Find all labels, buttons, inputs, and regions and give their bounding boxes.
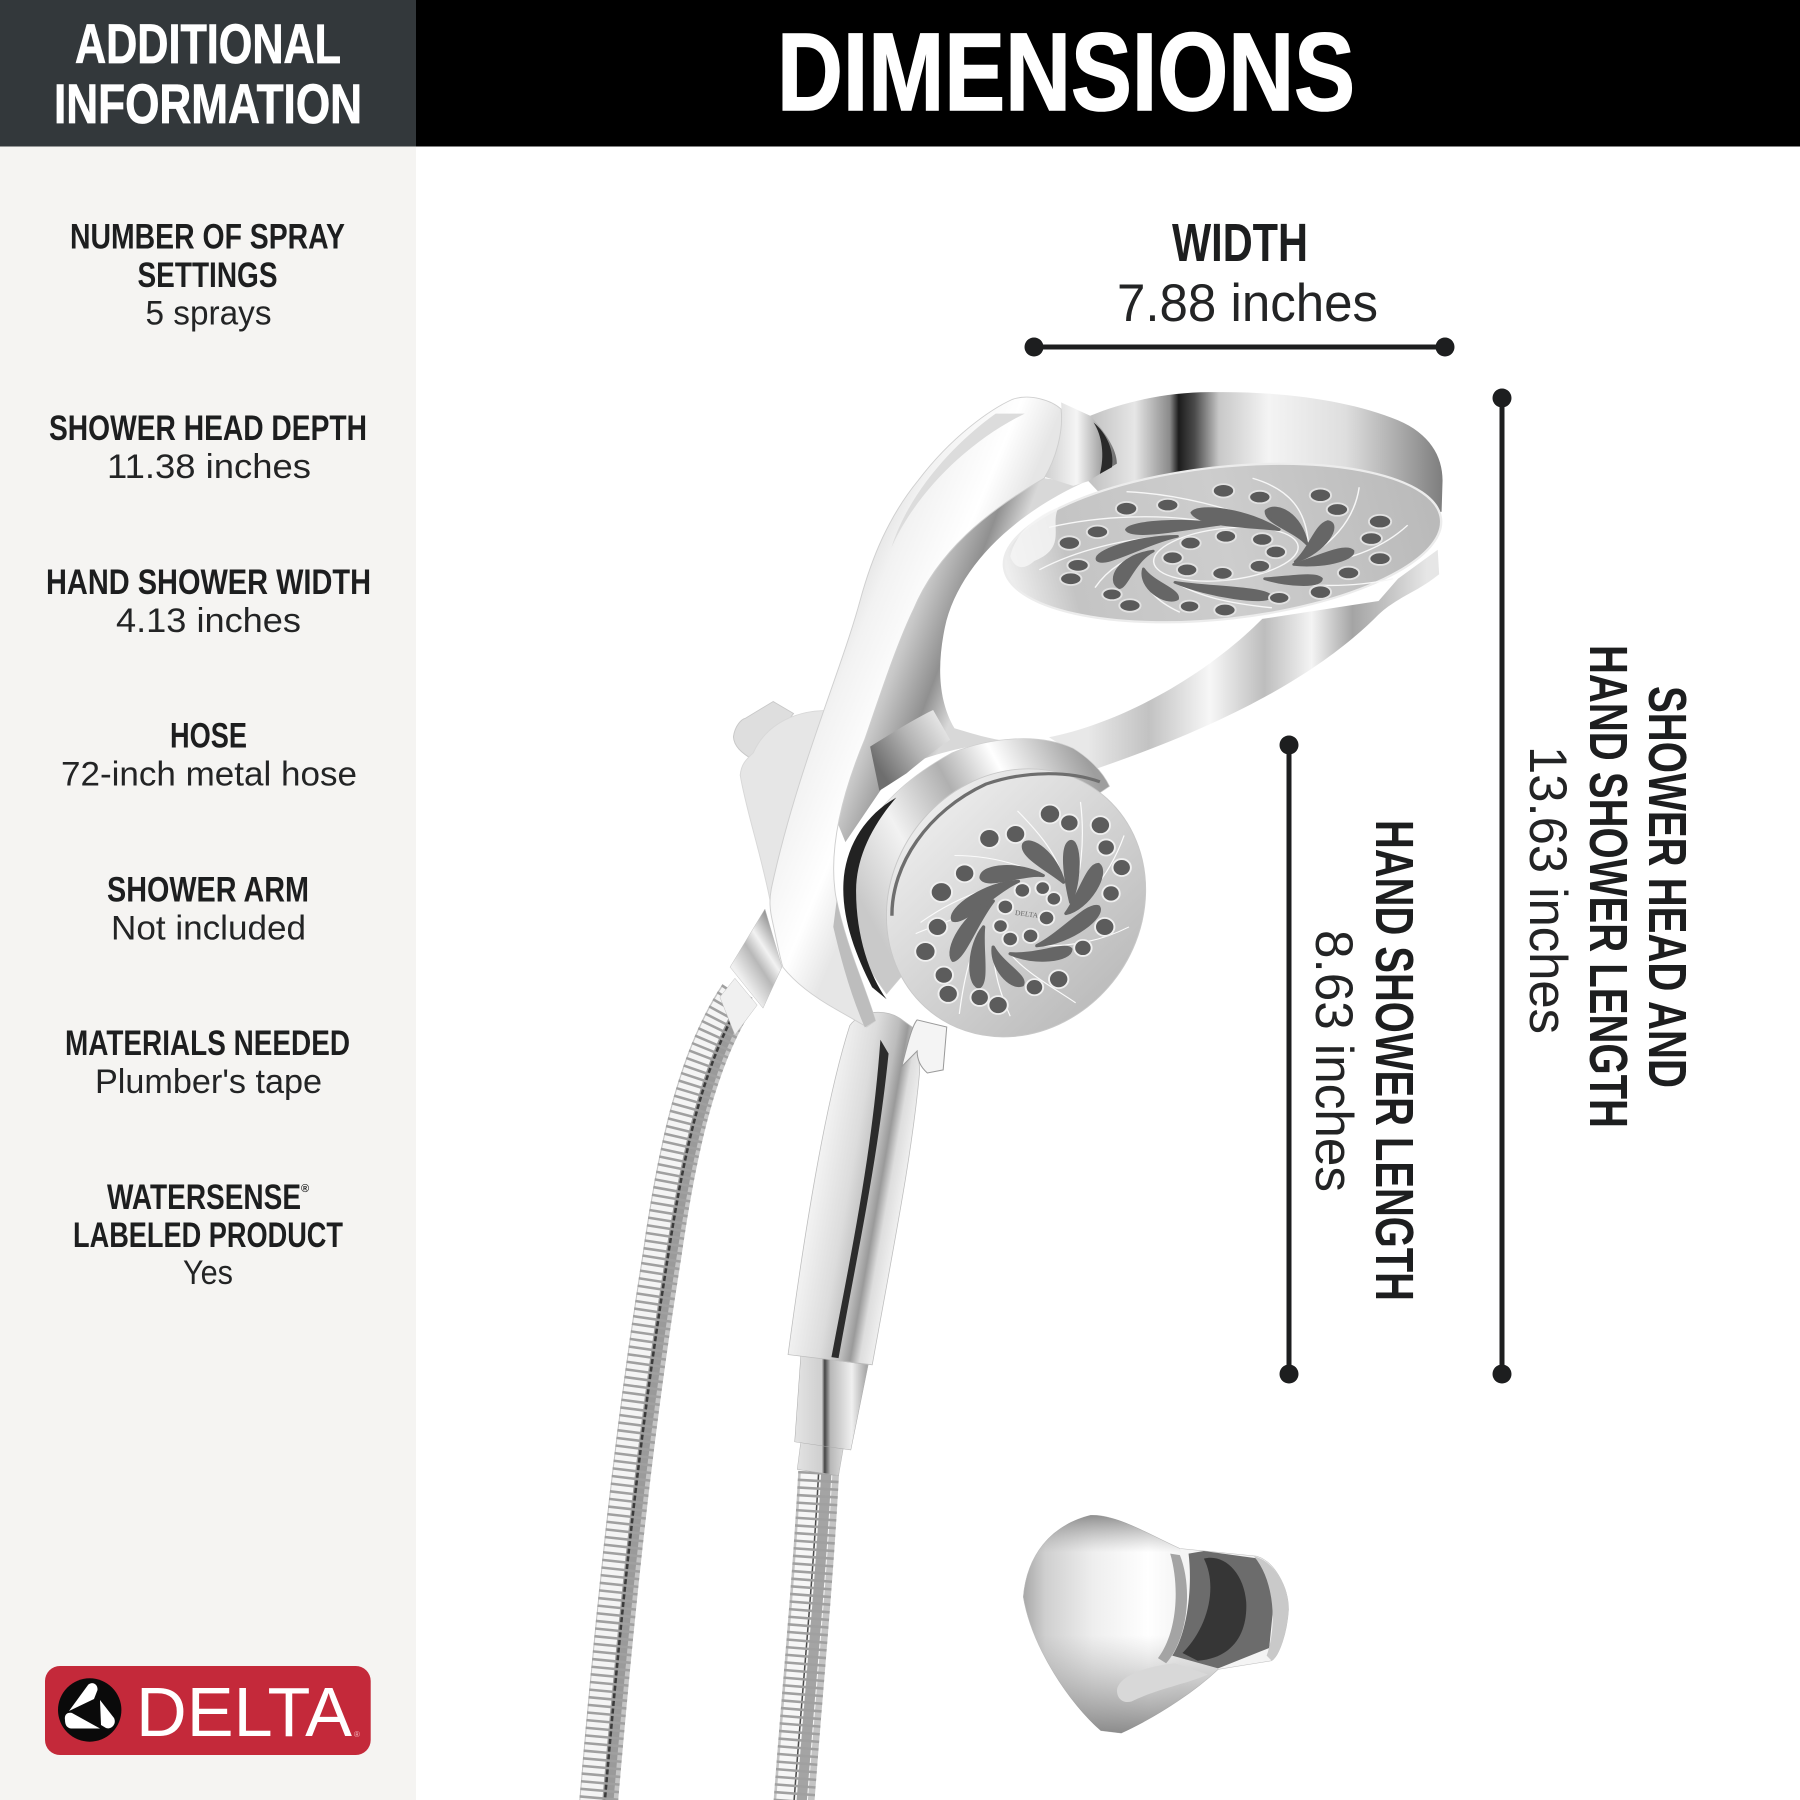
bracket lower slot — [1117, 1663, 1208, 1702]
hose: left — [596, 995, 748, 1800]
spec: shower arm — [107, 870, 309, 948]
trigger clip — [902, 1020, 947, 1073]
plate grey edge — [891, 414, 1025, 547]
dimension: shower head and hand shower length: HAND SHOWER LENGTH — [1578, 645, 1638, 1128]
spec: watersense labeled product: LABELED PRODUCT — [73, 1216, 343, 1255]
spec: watersense labeled product — [73, 1178, 343, 1292]
inner chrome arm — [831, 478, 1083, 842]
lower connecting arm — [1049, 550, 1439, 768]
spec: number of spray settings: NUMBER OF SPRAY — [70, 218, 345, 256]
hand face brand mark: DELTA — [1014, 908, 1039, 920]
spec: number of spray settings: SETTINGS — [138, 256, 278, 295]
logo: delta: ® — [354, 1730, 360, 1739]
hand face petals — [951, 841, 1101, 987]
dimension: width: WIDTH — [1172, 213, 1308, 273]
mount nub — [733, 701, 794, 760]
header: additional information: INFORMATION — [54, 72, 362, 135]
bracket outer lip — [1254, 1556, 1289, 1661]
spec: hose: 72-inch metal hose — [61, 756, 357, 794]
spec: hose: HOSE — [170, 716, 247, 756]
dimension: shower head and hand shower length — [1492, 388, 1697, 1384]
front plate — [770, 397, 1062, 1027]
spec: hand shower width — [46, 563, 371, 640]
bracket dark slot — [1172, 1551, 1274, 1668]
dark reflection on arm — [870, 710, 950, 791]
dimension: hand shower length: 8.63 inches — [1304, 930, 1363, 1192]
shower assembly — [720, 392, 1451, 1071]
logo: delta: DELTA — [136, 1673, 352, 1751]
face chrome rim — [892, 774, 1100, 916]
spec: shower head depth — [49, 409, 367, 486]
hand face swirl lines — [916, 802, 1129, 1016]
collar piece — [1045, 402, 1117, 486]
face nozzles — [1059, 484, 1391, 616]
hose: right — [792, 1472, 826, 1800]
spec: hose — [61, 716, 357, 794]
spec: number of spray settings — [70, 218, 345, 332]
face swirl lines — [1039, 478, 1408, 612]
logo: delta — [45, 1666, 371, 1755]
spec: watersense labeled product: WATERSENSE — [107, 1178, 301, 1217]
spec: materials needed: Plumber's tape — [95, 1063, 322, 1101]
plate lower lip — [833, 900, 875, 1027]
spec: shower arm: SHOWER ARM — [107, 870, 309, 910]
bracket slot core — [1182, 1558, 1246, 1661]
header: additional information: ADDITIONAL — [75, 12, 341, 75]
big shower head rim — [1088, 392, 1443, 583]
lower neck — [730, 909, 782, 1008]
grip reflection — [831, 1040, 889, 1358]
ball joint — [740, 710, 828, 909]
hand shower cup — [845, 739, 1110, 994]
header: additional information — [0, 0, 416, 146]
dimension: width — [1024, 213, 1454, 356]
big shower head face — [994, 443, 1451, 643]
dimension: shower head and hand shower length: 13.63 inches — [1518, 746, 1577, 1034]
face highlight — [1010, 507, 1059, 567]
hose fitting: small collar — [797, 1442, 843, 1476]
dimension: width: 7.88 inches — [1117, 274, 1378, 333]
neck fitting — [720, 978, 757, 1035]
title bar: dimensions: DIMENSIONS — [777, 11, 1355, 134]
collar dark gap — [1094, 422, 1112, 474]
panel: additional information sidebar — [0, 0, 416, 1800]
spec: watersense labeled product: Yes — [183, 1254, 233, 1292]
spec: hand shower width: HAND SHOWER WIDTH — [46, 563, 371, 602]
bracket shading — [1023, 1515, 1218, 1733]
dimension: shower head and hand shower length: SHOWER HEAD AND — [1637, 686, 1697, 1088]
spec: materials needed: MATERIALS NEEDED — [65, 1024, 350, 1063]
bracket chrome ring — [1158, 1554, 1187, 1663]
dimension: hand shower length: HAND SHOWER LENGTH — [1364, 820, 1424, 1301]
spec: hand shower width: 4.13 inches — [116, 602, 301, 640]
cup dark gap — [843, 797, 896, 999]
spec: number of spray settings: 5 sprays — [146, 294, 272, 332]
spec: materials needed — [65, 1024, 350, 1101]
title bar: dimensions — [416, 0, 1800, 146]
spec: shower head depth: 11.38 inches — [107, 448, 311, 486]
hand face nozzles — [915, 805, 1131, 1014]
spec: shower arm: Not included — [111, 910, 306, 948]
dimension: hand shower length — [1280, 736, 1424, 1384]
spec: shower head depth: SHOWER HEAD DEPTH — [49, 409, 367, 448]
face petals — [1097, 508, 1353, 600]
spec: watersense labeled product: ® — [301, 1183, 309, 1195]
hand shower face — [846, 735, 1186, 1071]
hoses and hand shower grip — [596, 995, 947, 1800]
hand shower grip — [788, 1012, 920, 1365]
hose fitting: tapered collar — [795, 1356, 868, 1450]
wall mount bracket — [1023, 1515, 1289, 1733]
